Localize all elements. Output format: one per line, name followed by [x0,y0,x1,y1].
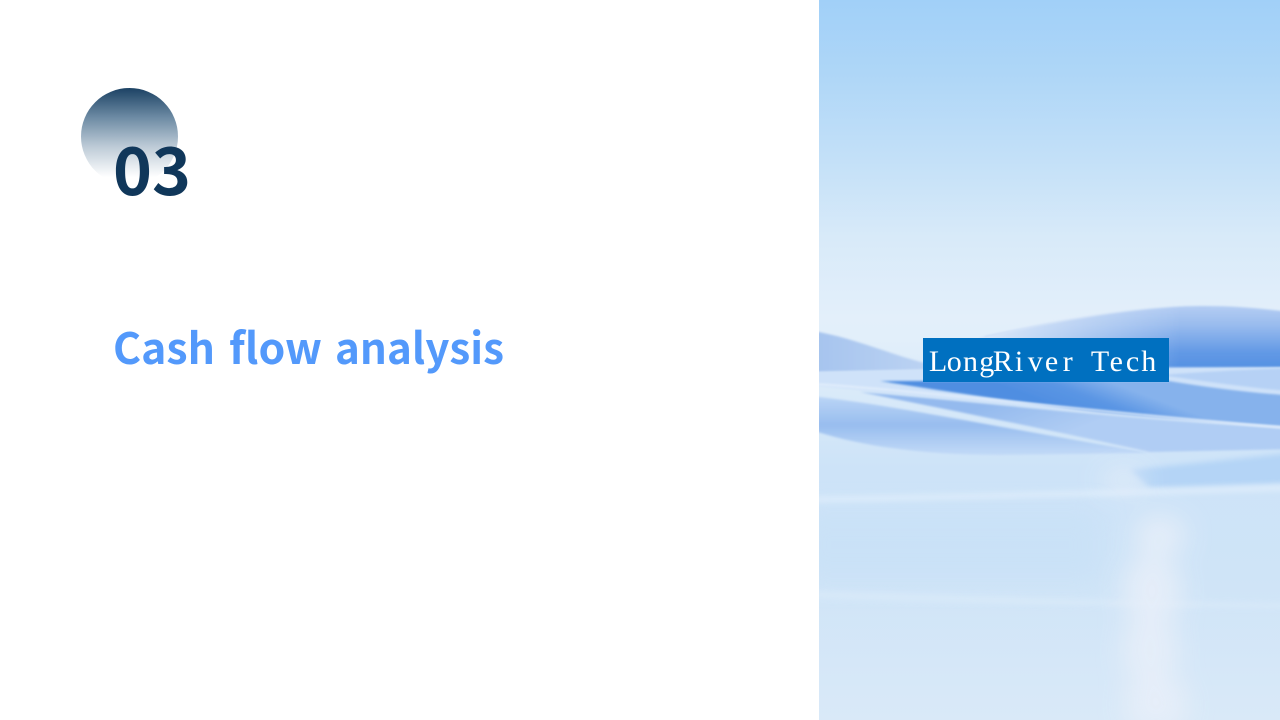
title: Cash [113,315,215,377]
panel: sky and dunes photo [800,0,1280,720]
water streak [800,484,1280,503]
lower right fold [860,392,1280,452]
number 03: 03 [113,119,191,215]
right dune [985,306,1280,370]
title: flow [229,315,322,377]
brand label [923,338,1169,382]
section number with gradient circle [81,88,191,215]
right pale ribbon [1169,368,1280,390]
water streak lower [800,590,1280,608]
title: analysis [335,315,504,377]
lower fold [819,396,1142,455]
left dune [819,331,923,372]
sky background [819,0,1280,720]
pale ribbon band [819,366,1280,394]
brand label: LongRiver Tech [929,345,1156,378]
glare column [1111,468,1185,720]
middle deep blue fold [880,381,1280,427]
white crease line [800,383,1280,429]
right dune left fade [984,311,1162,338]
far right shadow [1130,452,1280,488]
gradient circle [81,88,178,185]
tint band [800,510,1100,580]
